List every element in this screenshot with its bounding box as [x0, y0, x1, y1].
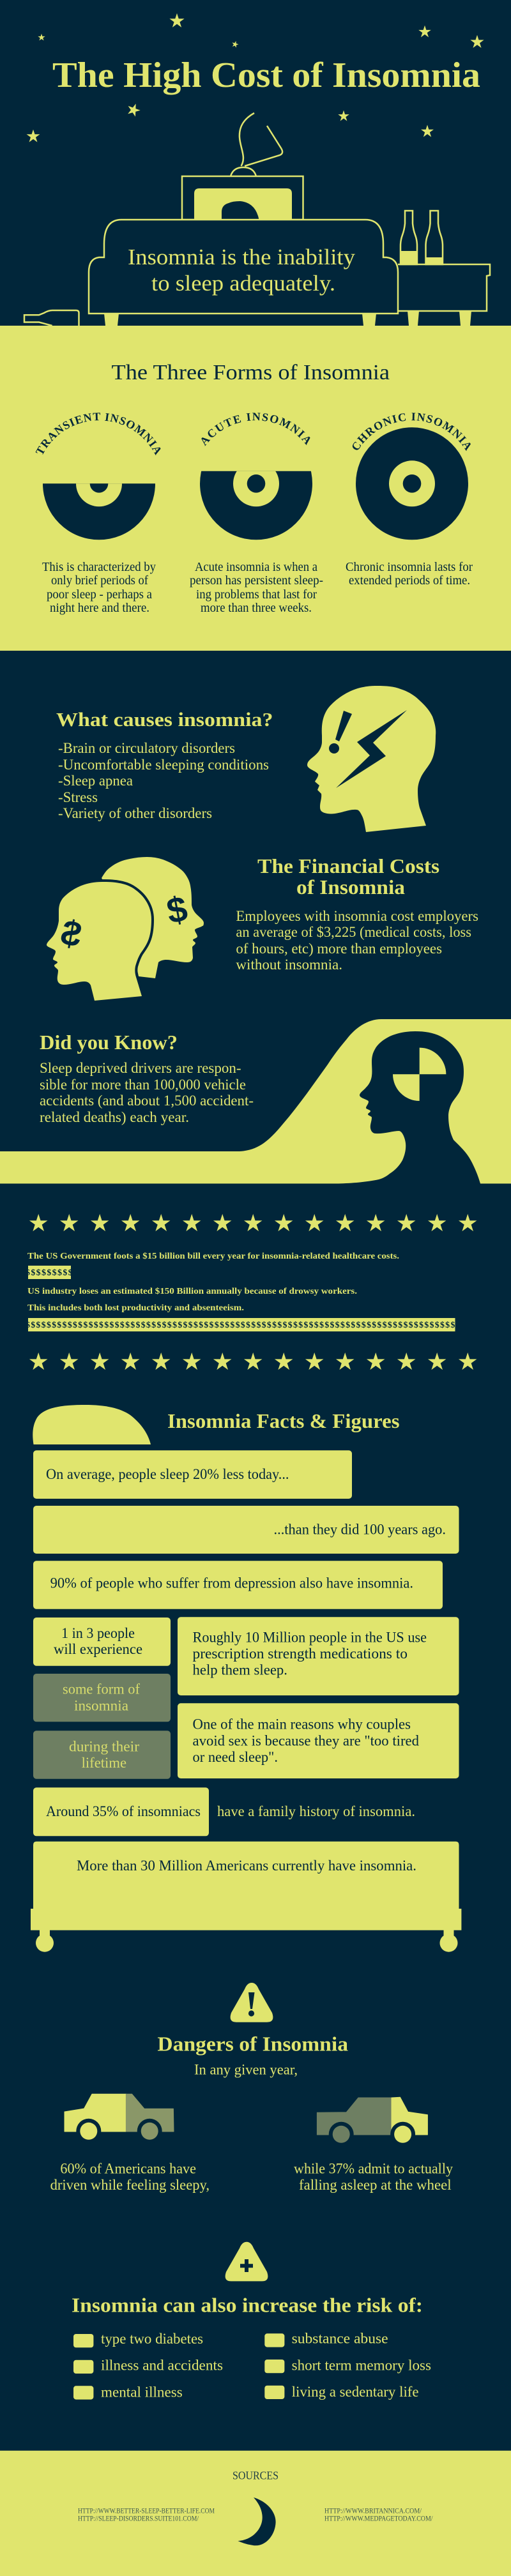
panel: what causes insomnia [56, 686, 436, 832]
fact: during their lifetime [33, 1731, 171, 1779]
caption: 37 percent [294, 2160, 453, 2193]
fact: prescription medications: Roughly 10 Million people in the US use [193, 1630, 427, 1646]
heading: What causes insomnia? [56, 708, 273, 731]
icon: car 37 percent [317, 2097, 427, 2147]
risk: short term memory loss: short term memory loss [292, 2357, 431, 2373]
source links right: HTTP://WWW.BRITANNICA.COM/ [324, 2506, 422, 2515]
caption: 37 percent: falling asleep at the wheel [299, 2177, 452, 2193]
panel: financial costs [47, 854, 478, 1001]
heading: Dangers of Insomnia [157, 2033, 348, 2056]
fact: some form of insomnia: some form of [63, 1681, 140, 1697]
list of causes [58, 740, 269, 821]
icon: car 60 percent [65, 2094, 174, 2144]
description: This is characterized by [42, 561, 156, 574]
source links right [324, 2506, 433, 2522]
fact: prescription medications: help them sleep. [193, 1662, 287, 1678]
panel: dangers of insomnia [50, 1983, 453, 2193]
fact: couples [178, 1703, 459, 1778]
acute insomnia [190, 413, 323, 615]
list of causes: -Variety of other disorders [58, 805, 212, 821]
fact: 100 years ago: ...than they did 100 years ago. [273, 1522, 446, 1538]
heading: Did you Know? [40, 1031, 178, 1054]
fact: some form of insomnia [33, 1674, 171, 1722]
industry cost text: US industry loses an estimated $150 Billion annually because of drowsy workers. [27, 1287, 357, 1296]
dollar bar small [28, 1266, 71, 1279]
definition text: to sleep adequately. [151, 271, 335, 296]
industry cost text: This includes both lost productivity and absenteeism. [27, 1303, 244, 1313]
description: person has persistent sleep- [190, 574, 323, 587]
transient insomnia [36, 413, 161, 615]
panel: facts and figures bed [31, 1405, 461, 1952]
description [42, 561, 156, 615]
description [190, 561, 323, 615]
icon: bottles on side table [400, 211, 443, 264]
panel: hero [24, 13, 490, 326]
icon: bed base with 30 million fact: More than 30 Million Americans currently have insomnia. [77, 1858, 416, 1874]
fact: 1 in 3 people [33, 1618, 171, 1666]
chronic insomnia [346, 413, 473, 587]
caption: 60 percent [50, 2160, 210, 2193]
description: more than three weeks. [201, 602, 312, 615]
body text: sible for more than 100,000 vehicle [40, 1077, 246, 1093]
risk: type two diabetes: type two diabetes [101, 2331, 203, 2347]
icon: head with lightning [307, 686, 436, 832]
title: The High Cost of Insomnia [52, 56, 480, 95]
icon: warning triangle [231, 1983, 273, 2022]
body text: of hours, etc) more than employees [236, 941, 442, 957]
body text: Sleep deprived drivers are respon- [40, 1060, 241, 1076]
icon: fallen bottle [24, 310, 79, 326]
body text: accidents (and about 1,500 accident- [40, 1093, 254, 1109]
heading: The Financial Costs [257, 854, 439, 877]
icon: crescent moon [238, 2497, 276, 2545]
source links left: HTTP://SLEEP-DISORDERS.SUITE101.COM/ [78, 2513, 199, 2522]
star row top [29, 1214, 477, 1231]
description: Acute insomnia is when a [195, 561, 317, 574]
curved label: TRANSIENT INSOMNIA [36, 413, 161, 455]
body text: Employees with insomnia cost employers [236, 908, 478, 924]
subheading: In any given year, [194, 2062, 298, 2078]
road swoosh with crash-test head [0, 1019, 511, 1184]
heading: of Insomnia [296, 875, 405, 898]
risk: mental illness: mental illness [101, 2384, 183, 2400]
description: poor sleep - perhaps a [47, 588, 152, 602]
description: extended periods of time. [349, 574, 470, 587]
half disc [43, 483, 155, 540]
icon: sofa [89, 220, 398, 326]
caption: 60 percent: driven while feeling sleepy, [50, 2177, 210, 2193]
dollar sign left: $ [58, 912, 85, 955]
source links left [78, 2506, 215, 2522]
sources heading: SOURCES [233, 2469, 278, 2481]
fact: less sleep today [33, 1450, 352, 1499]
panel: did you know [0, 1019, 511, 1184]
stars in the night sky [27, 13, 484, 142]
fact: prescription medications [178, 1617, 459, 1695]
description: night here and there. [50, 602, 149, 615]
definition text: Insomnia is the inability [128, 245, 356, 269]
risk: illness and accidents: illness and accidents [101, 2358, 223, 2374]
panel: increased risks [72, 2242, 431, 2400]
fact: 1 in 3 people: 1 in 3 people [61, 1625, 135, 1641]
list of causes: -Stress [58, 789, 98, 805]
fact: 1 in 3 people: will experience [54, 1641, 142, 1657]
panel: sources footer [0, 2451, 511, 2576]
fact: family history: have a family history of insomnia. [217, 1803, 415, 1819]
description: Chronic insomnia lasts for [346, 561, 473, 574]
icon: picture on the wall [182, 113, 303, 220]
fact: family history: Around 35% of insomniacs [46, 1803, 201, 1819]
star row bottom [29, 1352, 477, 1370]
fact: depression: 90% of people who suffer from depression also have insomnia. [50, 1575, 413, 1591]
body text: an average of $3,225 (medical costs, loss [236, 924, 471, 940]
dollar bar small: $$$$$$$$$$ [26, 1268, 78, 1278]
fact: during their lifetime: lifetime [82, 1755, 126, 1771]
icon: plus triangle [225, 2242, 268, 2281]
body text [236, 908, 478, 973]
panel: economic cost [26, 1214, 477, 1370]
fact: couples: One of the main reasons why couples [193, 1716, 411, 1732]
government cost text: The US Government foots a $15 billion bill every year for insomnia-related healthcare costs. [27, 1252, 399, 1261]
list of causes: -Uncomfortable sleeping conditions [58, 757, 269, 773]
heading [257, 854, 439, 898]
description [346, 561, 473, 587]
fact: depression [33, 1561, 443, 1609]
fact: couples: or need sleep". [193, 1749, 278, 1765]
full disc [356, 427, 468, 540]
industry cost text [27, 1287, 357, 1313]
list of causes: -Brain or circulatory disorders [58, 740, 235, 756]
partial disc [200, 471, 312, 540]
heading: The Three Forms of Insomnia [111, 361, 390, 384]
icon: pillow [33, 1405, 151, 1444]
curved label: ACUTE INSOMNIA [201, 413, 310, 446]
list of causes: -Sleep apnea [58, 773, 133, 789]
caption: 37 percent: while 37% admit to actually [294, 2160, 453, 2176]
curved label: CHRONIC INSOMNIA [353, 413, 471, 451]
body text [40, 1060, 254, 1125]
fact: couples: avoid sex is because they are "too tired [193, 1732, 419, 1748]
body text: related deaths) each year. [40, 1109, 189, 1125]
risk: substance abuse: substance abuse [292, 2331, 388, 2347]
caption: 60 percent: 60% of Americans have [60, 2160, 196, 2176]
source links right: HTTP://WWW.MEDPAGETODAY.COM/ [324, 2513, 433, 2522]
fact: 100 years ago [33, 1506, 459, 1554]
source links left: HTTP://WWW.BETTER-SLEEP-BETTER-LIFE.COM [78, 2506, 215, 2515]
fact: during their lifetime: during their [69, 1738, 139, 1754]
fact: less sleep today: On average, people sleep 20% less today... [46, 1466, 289, 1482]
fact: prescription medications: prescription strength medications to [193, 1646, 408, 1662]
icon: two heads with dollar signs [47, 857, 204, 1001]
dollar bar large: $$$$$$$$$$$$$$$$$$$$$$$$$$$$$$$$$$$$$$$$$$$$$$$$$$$$$$$$$$$$$$$$$$$$$$$$$$$$$$$$$$$ [26, 1321, 461, 1330]
description: only brief periods of [51, 574, 148, 587]
panel: three forms of insomnia [0, 326, 511, 651]
fact: some form of insomnia: insomnia [74, 1697, 128, 1713]
body text: without insomnia. [236, 957, 342, 973]
heading: Insomnia Facts & Figures [167, 1409, 400, 1432]
heading: Insomnia can also increase the risk of: [72, 2294, 423, 2317]
icon: side table [398, 264, 490, 326]
fact: family history [33, 1787, 415, 1836]
risk: living a sedentary life: living a sedentary life [292, 2384, 419, 2400]
definition text [128, 245, 356, 296]
dollar sign right: $ [164, 888, 190, 931]
description: ing problems that last for [196, 588, 317, 602]
icon: bed base with 30 million fact [31, 1842, 461, 1952]
